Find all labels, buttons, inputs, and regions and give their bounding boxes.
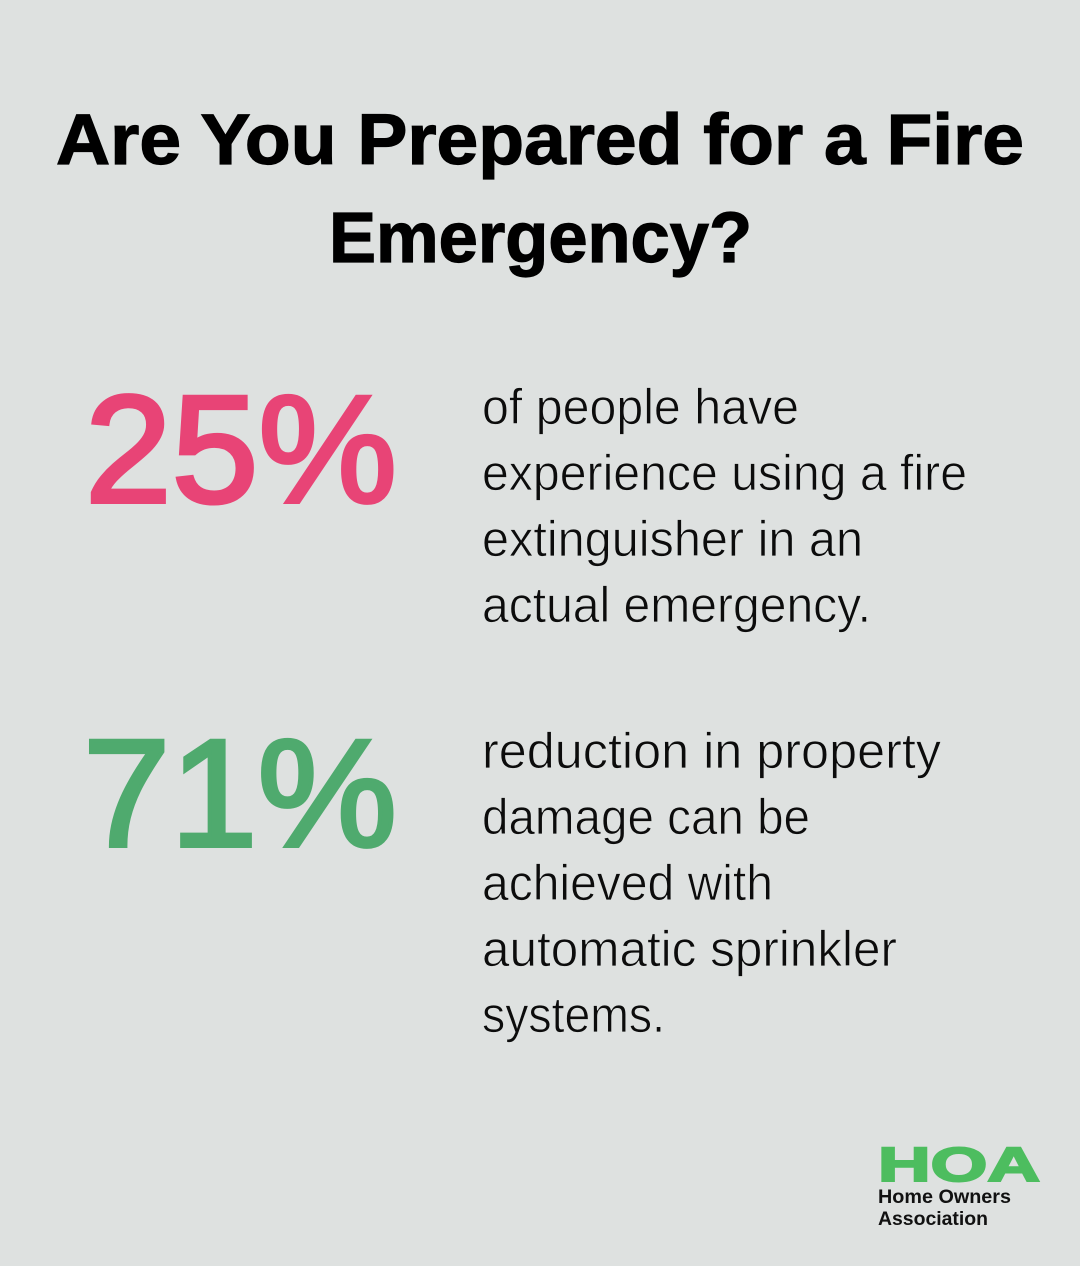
statistic: 71%: 71% <box>83 708 397 879</box>
text block: 71% description: achieved with <box>482 855 773 911</box>
text block: 71% description: damage can be <box>482 789 810 845</box>
logo: Home Owners Association: Association <box>878 1209 988 1230</box>
logo: Home Owners Association: HOA <box>878 1139 1040 1192</box>
title: Emergency? <box>329 199 752 278</box>
text block: 25% description: experience using a fire <box>482 445 967 501</box>
logo: Home Owners Association: Home Owners <box>878 1187 1011 1208</box>
title <box>56 101 1024 278</box>
text block: 71% description <box>482 723 941 1043</box>
text block: 71% description: automatic sprinkler <box>482 921 897 977</box>
text block: 25% description <box>482 379 967 633</box>
text block: 71% description: systems. <box>482 987 665 1043</box>
text block: 25% description: of people have <box>482 379 799 435</box>
text block: 25% description: actual emergency. <box>482 577 871 633</box>
title: Are You Prepared for a Fire <box>56 101 1024 180</box>
logo: Home Owners Association <box>878 1139 1040 1230</box>
text block: 71% description: reduction in property <box>482 723 941 779</box>
text block: 25% description: extinguisher in an <box>482 511 863 567</box>
statistic: 25%: 25% <box>85 364 397 535</box>
